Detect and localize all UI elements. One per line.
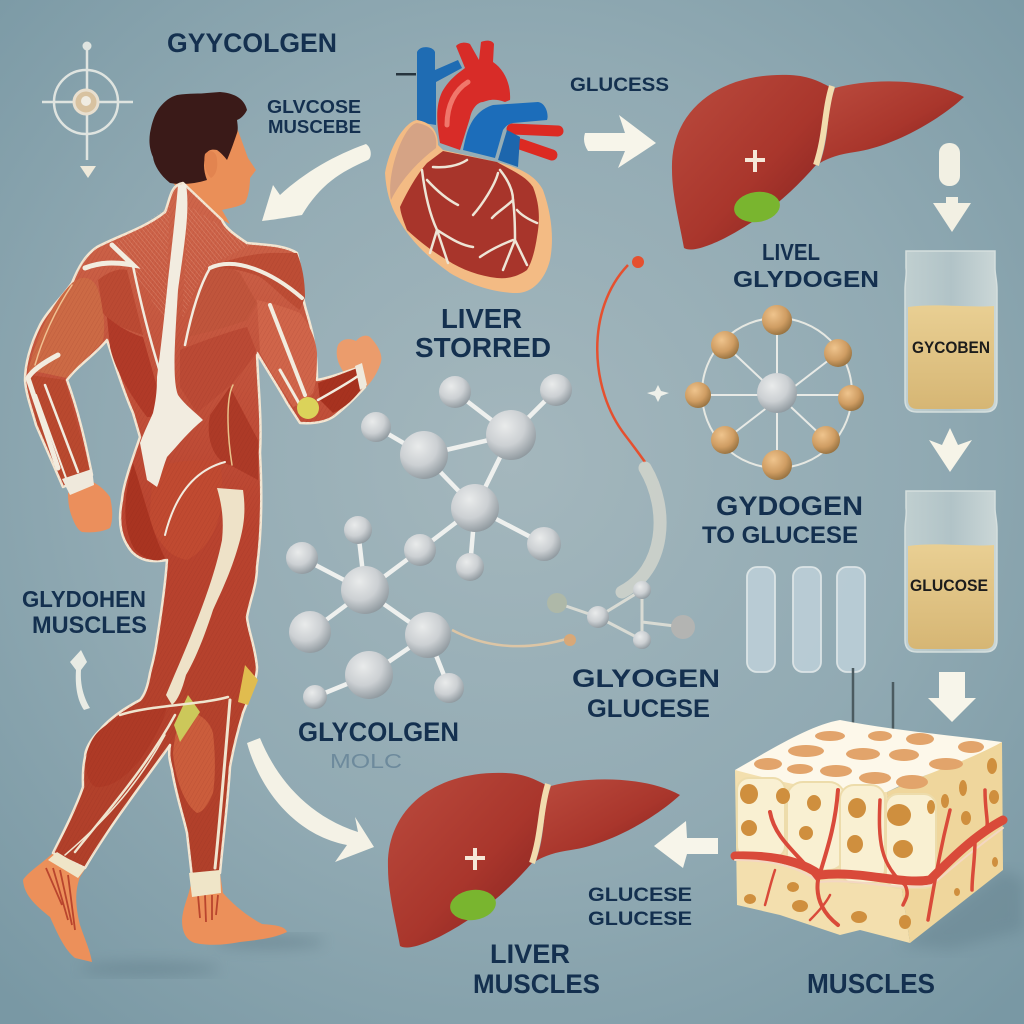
blue vena cava (417, 47, 462, 125)
figure shadow (80, 936, 325, 975)
right lat (180, 327, 257, 413)
arrow: leg to liver (247, 738, 374, 862)
figure: muscular man (23, 92, 381, 975)
rear thigh (86, 707, 167, 787)
knee yellow (174, 695, 200, 742)
lower liver cross (465, 848, 485, 870)
trapezius fibres (113, 205, 250, 320)
radial centre atom (757, 373, 797, 413)
small red arteries (512, 129, 558, 155)
label: glucese glucese: GLUCESE (588, 909, 692, 930)
body muscle silhouette (25, 183, 365, 877)
aorta highlight (447, 82, 468, 125)
right upper arm (257, 300, 317, 407)
arrow: liver to jar (933, 143, 971, 232)
label: liver glydogen (733, 239, 879, 292)
arrow: small up (70, 650, 90, 710)
label: gydogen to glucese: TO GLUCESE (702, 522, 858, 549)
test tubes (747, 567, 865, 672)
arrow: red curved connector (597, 256, 660, 592)
vein stub (396, 73, 416, 76)
left scapula (98, 269, 143, 335)
tissue holes (740, 758, 999, 929)
small molecule bonds (557, 590, 683, 640)
right hand (337, 336, 381, 388)
tissue upper cells (737, 778, 936, 888)
glycogen fill (908, 305, 994, 409)
label: liver muscles: MUSCLES (473, 969, 600, 999)
liver right lobe (820, 81, 964, 163)
knee side (238, 665, 258, 705)
lower liver ligament (532, 784, 548, 863)
icon: small sparkle (647, 385, 669, 402)
ventricle muscle (400, 151, 539, 278)
needles (853, 668, 893, 745)
label: liver storred: LIVER (441, 303, 522, 334)
jar: glycogen (905, 251, 997, 412)
waist (209, 387, 258, 480)
left ankle band (48, 852, 85, 878)
label: liver storred: STORRED (415, 332, 551, 363)
pulmonary stub (498, 130, 520, 167)
label: glyogen glucese (572, 665, 720, 723)
heart outer (385, 120, 552, 293)
left arm upper (28, 278, 104, 378)
leg tendons (65, 697, 230, 868)
pulmonary artery (463, 102, 548, 158)
right foot (182, 873, 287, 945)
liver: bottom center (388, 773, 680, 948)
glycogen jar label: GYCOBEN (912, 338, 990, 357)
label: glucese glucese: GLUCESE (588, 885, 692, 906)
tissue right face (887, 742, 1003, 943)
icon: target crosshair (42, 42, 133, 178)
connector to glycogen (452, 630, 570, 646)
elbow yellow (297, 397, 319, 419)
molecule bonds (302, 390, 556, 697)
right scapula (187, 267, 257, 337)
label: glycose muscebe: MUSCEBE (268, 117, 361, 137)
wristband (62, 469, 94, 495)
small molecule (452, 581, 695, 649)
tissue red vessels (735, 790, 1003, 925)
title label: GYYCOLGEN (167, 28, 337, 58)
label: gydogen to glucese (702, 491, 863, 549)
liver ligament (816, 86, 832, 165)
rear deltoid (210, 253, 305, 310)
hair (149, 92, 247, 184)
label: liver muscles (473, 939, 600, 999)
arrow: jar to jar (929, 428, 972, 472)
shoulder tendons (28, 245, 358, 535)
jar: glucose (905, 491, 997, 652)
label: glycolgen molc (298, 717, 459, 773)
label: glydohen muscles: MUSCLES (32, 612, 147, 639)
thigh tendon (166, 488, 244, 705)
tissue left face (735, 770, 910, 943)
arrow: heart to liver (584, 115, 656, 168)
arrow: tissue to liver (654, 821, 718, 868)
muscle fibres (25, 183, 365, 877)
label: glyogen glucese: GLYOGEN (572, 665, 720, 693)
atrium patch (390, 123, 436, 200)
molecule atoms (286, 374, 572, 709)
right wrist band (355, 363, 367, 390)
ear (204, 151, 217, 178)
left lat (107, 317, 163, 417)
arrow: jar to tissue (928, 672, 976, 722)
liver left lobe (672, 75, 832, 250)
spine tendon (140, 184, 203, 487)
right ankle band (189, 870, 221, 897)
icon: heart (385, 41, 558, 293)
left forearm (30, 375, 90, 485)
label: glycolgen molc: GLYCOLGEN (298, 717, 459, 747)
gallbladder (732, 189, 782, 225)
lower liver right lobe (536, 779, 680, 861)
label: glycose muscebe: GLVCOSE (267, 97, 361, 117)
lower gallbladder (448, 887, 498, 923)
left hand (68, 482, 112, 532)
muscle groups (28, 253, 363, 813)
label: liver glydogen: LIVEL (762, 239, 820, 265)
glucose fill (908, 544, 994, 649)
label: glucese glucese (588, 885, 692, 930)
tissue block (735, 720, 1024, 950)
right calf (173, 713, 215, 813)
label: glyogen glucese: GLUCESE (587, 695, 710, 723)
liver cross (745, 150, 765, 172)
label: glydohen muscles (22, 586, 147, 639)
label: glucess: GLUCESS (570, 75, 669, 96)
label: gydogen to glucese: GYDOGEN (716, 491, 863, 521)
label: liver muscles: LIVER (490, 939, 570, 969)
right forearm (318, 367, 363, 413)
tissue top spots (754, 731, 984, 789)
left buttock (125, 463, 165, 560)
left foot (23, 853, 92, 962)
label: liver storred (415, 303, 551, 363)
label: glycolgen molc: MOLC (330, 751, 402, 773)
foot tendons (46, 868, 218, 930)
tissue shadow (900, 870, 1024, 950)
arrow: to head (262, 144, 371, 221)
neck and face (170, 118, 256, 224)
label: glydohen muscles: GLYDOHEN (22, 586, 146, 612)
coronary vessels (422, 160, 537, 270)
radial spokes (698, 320, 851, 465)
label: liver glydogen: GLYDOGEN (733, 266, 879, 292)
label: muscles: MUSCLES (807, 968, 935, 999)
small molecule atoms (547, 581, 695, 649)
aorta (437, 41, 510, 150)
radial outer atoms (685, 305, 864, 480)
label: glycose muscebe (267, 97, 361, 137)
chart: radial molecule (685, 305, 864, 480)
lower liver left lobe (388, 773, 548, 948)
glucose jar label: GLUCOSE (910, 576, 988, 595)
liver: top right (672, 75, 964, 250)
glute (150, 460, 222, 560)
tissue top face (735, 720, 1002, 793)
chart: glycogen molecule (286, 374, 572, 709)
